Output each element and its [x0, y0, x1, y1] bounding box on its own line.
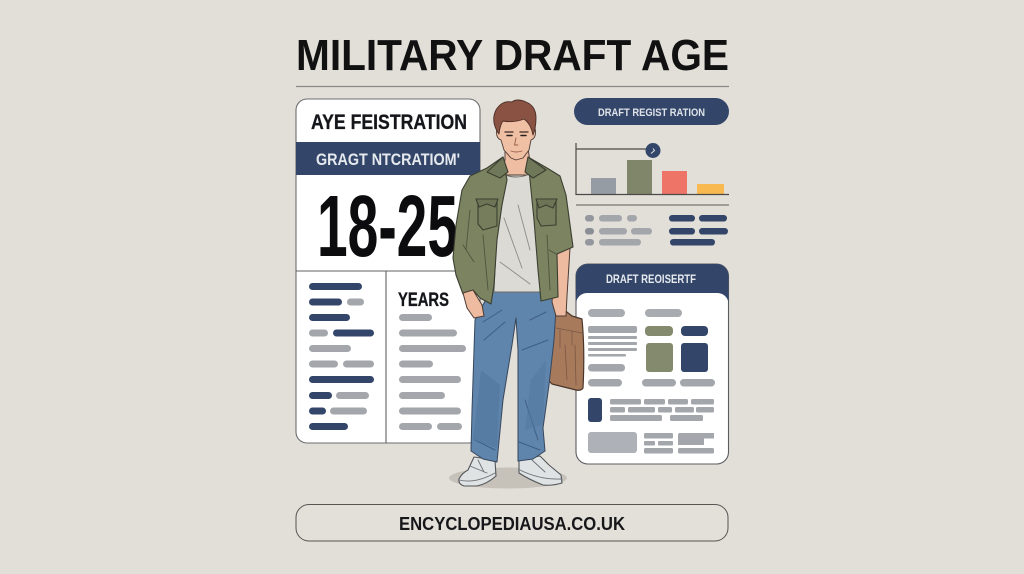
shadow	[449, 468, 567, 488]
panel: draft requirements	[576, 264, 728, 464]
heading: years: YEARS	[398, 290, 449, 311]
shoes	[459, 456, 562, 486]
panel: age registration	[296, 99, 480, 443]
right column text bars	[399, 314, 466, 430]
banner: navy strip: GRAGT NTCRATIOM'	[316, 150, 460, 169]
footer: website address: ENCYCLOPEDIAUSA.CO.UK	[399, 513, 626, 534]
arm and hand, right side	[552, 248, 570, 316]
bag	[549, 309, 584, 390]
t-shirt	[494, 173, 541, 292]
icon: chart marker	[646, 143, 660, 158]
placeholder text and colour blocks	[588, 309, 715, 454]
head	[494, 100, 536, 160]
neck	[500, 148, 537, 175]
footer: website address	[296, 504, 728, 541]
big number: age range: 18-25	[317, 178, 458, 275]
title: MILITARY DRAFT AGE	[296, 31, 729, 80]
left column text bars	[309, 283, 374, 430]
jeans	[471, 288, 557, 462]
legend bars	[585, 215, 728, 246]
heading: age registration: AYE FEISTRATION	[311, 111, 467, 134]
banner: navy strip	[296, 142, 480, 175]
left hand	[463, 290, 484, 318]
heading: draft requirements: DRAFT REOISERTF	[606, 272, 696, 286]
pill: draft registration: DRAFT REGIST RATION	[598, 107, 705, 119]
bar chart	[576, 143, 729, 194]
pill: draft registration	[574, 98, 729, 125]
illustration: young man	[449, 100, 584, 488]
jacket	[453, 157, 573, 304]
